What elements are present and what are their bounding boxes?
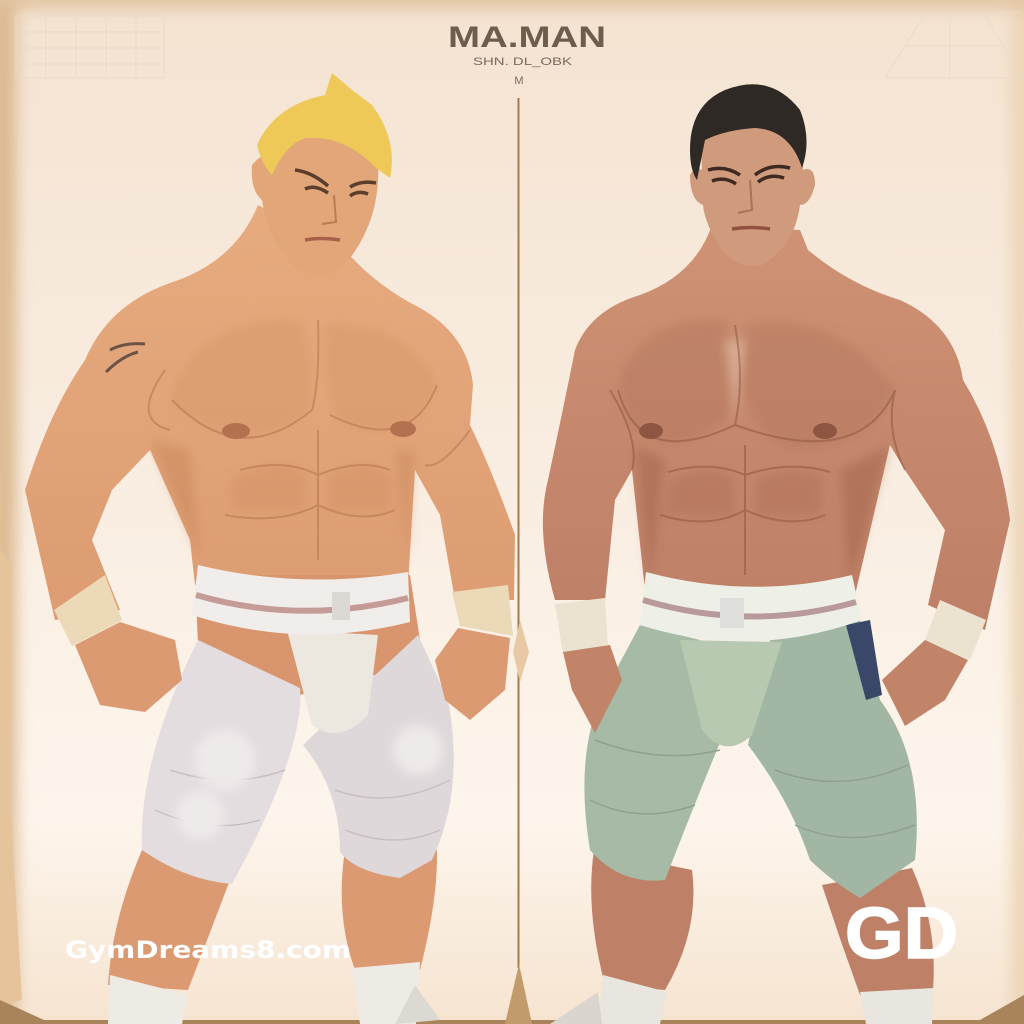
title [448,21,606,68]
right figure: muscle lines [610,325,905,575]
left figure: waistband [192,565,410,634]
subtitle: SHN. DL_OBK [473,56,573,68]
left figure: face features [295,170,376,240]
right figure: shorts seams [590,740,915,838]
left figure: blonde hair [257,73,392,178]
left figure: shorts [142,630,454,884]
watermark: website: GymDreams8.com [65,936,351,964]
left figure: shorts seams [155,770,450,840]
right figure: wristbands [555,598,986,660]
left figure: wristbands [54,575,513,646]
right figure: nipples [639,423,837,439]
left figure: hands [75,622,510,720]
left figure: chest and abdomen shading [150,320,437,560]
corner sketch: top right [885,12,1022,78]
subtitle mark: M [514,75,524,87]
right figure: shorts [584,620,917,898]
left figure: neck and torso [25,205,515,620]
right figure: pocket items [846,620,882,700]
bottom corner ornaments [0,995,1024,1020]
left figure: shoulder tattoo [106,344,145,372]
right figure: front panel [680,640,782,746]
right figure: face features [708,167,790,229]
left figure: socks [108,962,440,1024]
left figure: head [252,73,392,276]
corner sketch: top left [16,16,164,78]
left figure: leg pad highlights [176,725,443,839]
right figure: chest and abdomen shading [618,320,895,585]
right figure: hands [563,640,968,733]
logo: GD: GD [845,894,958,974]
center divider line [505,98,532,1024]
left figure: nipples [222,421,416,439]
left figure: front panel [287,630,378,733]
title: MA.MAN [448,21,606,54]
left figure: muscle lines [149,320,470,560]
left figure: pelvis [195,575,420,695]
right figure: waistband [640,572,862,641]
right figure: head [690,84,815,266]
left figure: lower legs [108,850,437,990]
right figure: neck and torso [543,225,1010,630]
right figure [543,84,1010,1024]
right figure: lower legs [591,850,934,1000]
right figure: socks [550,975,934,1024]
right figure: dark hair [690,84,807,180]
left figure [25,73,515,1024]
